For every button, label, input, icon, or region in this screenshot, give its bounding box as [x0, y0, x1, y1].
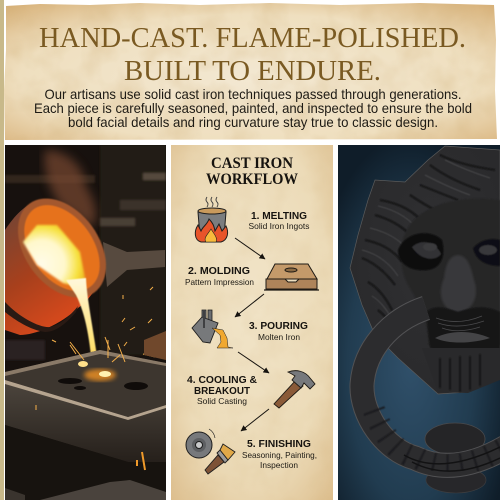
step 1 label: 1. MELTING	[251, 210, 307, 222]
lion face	[401, 199, 500, 345]
step 1 label: Solid Iron Ingots	[248, 221, 310, 231]
mold body	[5, 382, 166, 462]
intro paragraph: bold facial details and ring curvature stay true to classic design.	[68, 115, 438, 130]
ladle body	[5, 204, 92, 335]
eye sockets	[398, 233, 500, 270]
step 1 label	[248, 212, 310, 230]
workflow title	[206, 158, 298, 184]
ladle rim	[18, 198, 106, 298]
ring knocker	[362, 308, 500, 471]
icon: sand mold box	[264, 264, 319, 290]
molten surface	[24, 204, 100, 291]
intro paragraph	[34, 87, 472, 130]
icon: ladle pouring iron	[192, 310, 233, 348]
step 5 label: Inspection	[260, 460, 298, 470]
step 3 label: Molten Iron	[258, 332, 300, 342]
step 2 label: Pattern Impression	[185, 277, 254, 287]
heading: BUILT TO ENDURE.	[124, 55, 381, 87]
arrow: pouring to cooling	[238, 352, 269, 373]
step 3 label: 3. POURING	[249, 320, 308, 332]
step 2 label: 2. MOLDING	[188, 265, 250, 277]
step 2 label	[186, 267, 254, 286]
ladle handle	[103, 242, 165, 287]
step 4 label: Solid Casting	[197, 396, 247, 406]
muzzle and mouth	[426, 307, 500, 351]
mold top	[5, 350, 166, 417]
heading: HAND-CAST. FLAME-POLISHED.	[39, 22, 466, 54]
panel: lion door knocker photo	[338, 145, 500, 500]
panel: foundry pouring photo	[0, 145, 166, 500]
step 3 label	[249, 322, 308, 340]
splash glow	[84, 369, 116, 381]
step 4 label: 4. COOLING &	[187, 374, 257, 386]
panel: cast iron workflow	[171, 145, 333, 500]
mane highlights	[362, 160, 490, 325]
bottom boss	[425, 423, 485, 455]
step 5 label	[242, 438, 317, 470]
nose	[441, 255, 476, 312]
step 5 label: Seasoning, Painting,	[242, 450, 317, 460]
mold holes	[58, 378, 148, 390]
intro paragraph: Each piece is carefully seasoned, painted, and inspected to ensure the bold	[34, 101, 472, 116]
arrow: cooling to finishing	[241, 409, 269, 431]
workflow title: WORKFLOW	[206, 171, 298, 188]
icon: grinding disc and paint brush	[186, 429, 235, 474]
sparks	[36, 287, 155, 410]
icon: hammer	[274, 371, 315, 408]
mane strands	[362, 155, 495, 335]
workflow title: CAST IRON	[211, 155, 293, 172]
step 4 label	[187, 374, 257, 406]
background shelves	[5, 145, 166, 360]
molten stream	[66, 277, 97, 352]
step 4 label: BREAKOUT	[194, 385, 251, 397]
chin beard	[422, 348, 500, 393]
decorative left edge strip	[0, 0, 4, 500]
arrow: molding to pouring	[235, 294, 264, 317]
header panel	[4, 3, 498, 140]
hot drips	[137, 452, 145, 470]
intro paragraph: Our artisans use solid cast iron techniques passed through generations.	[44, 87, 462, 102]
icon: melting pot over flames	[195, 197, 228, 242]
brick at right	[144, 331, 166, 360]
heading	[39, 22, 466, 87]
lion mane	[350, 146, 500, 394]
smoke	[44, 150, 96, 228]
foreground bottom	[6, 425, 26, 432]
step 5 label: 5. FINISHING	[247, 438, 311, 450]
arrow: melting to molding	[235, 238, 265, 259]
